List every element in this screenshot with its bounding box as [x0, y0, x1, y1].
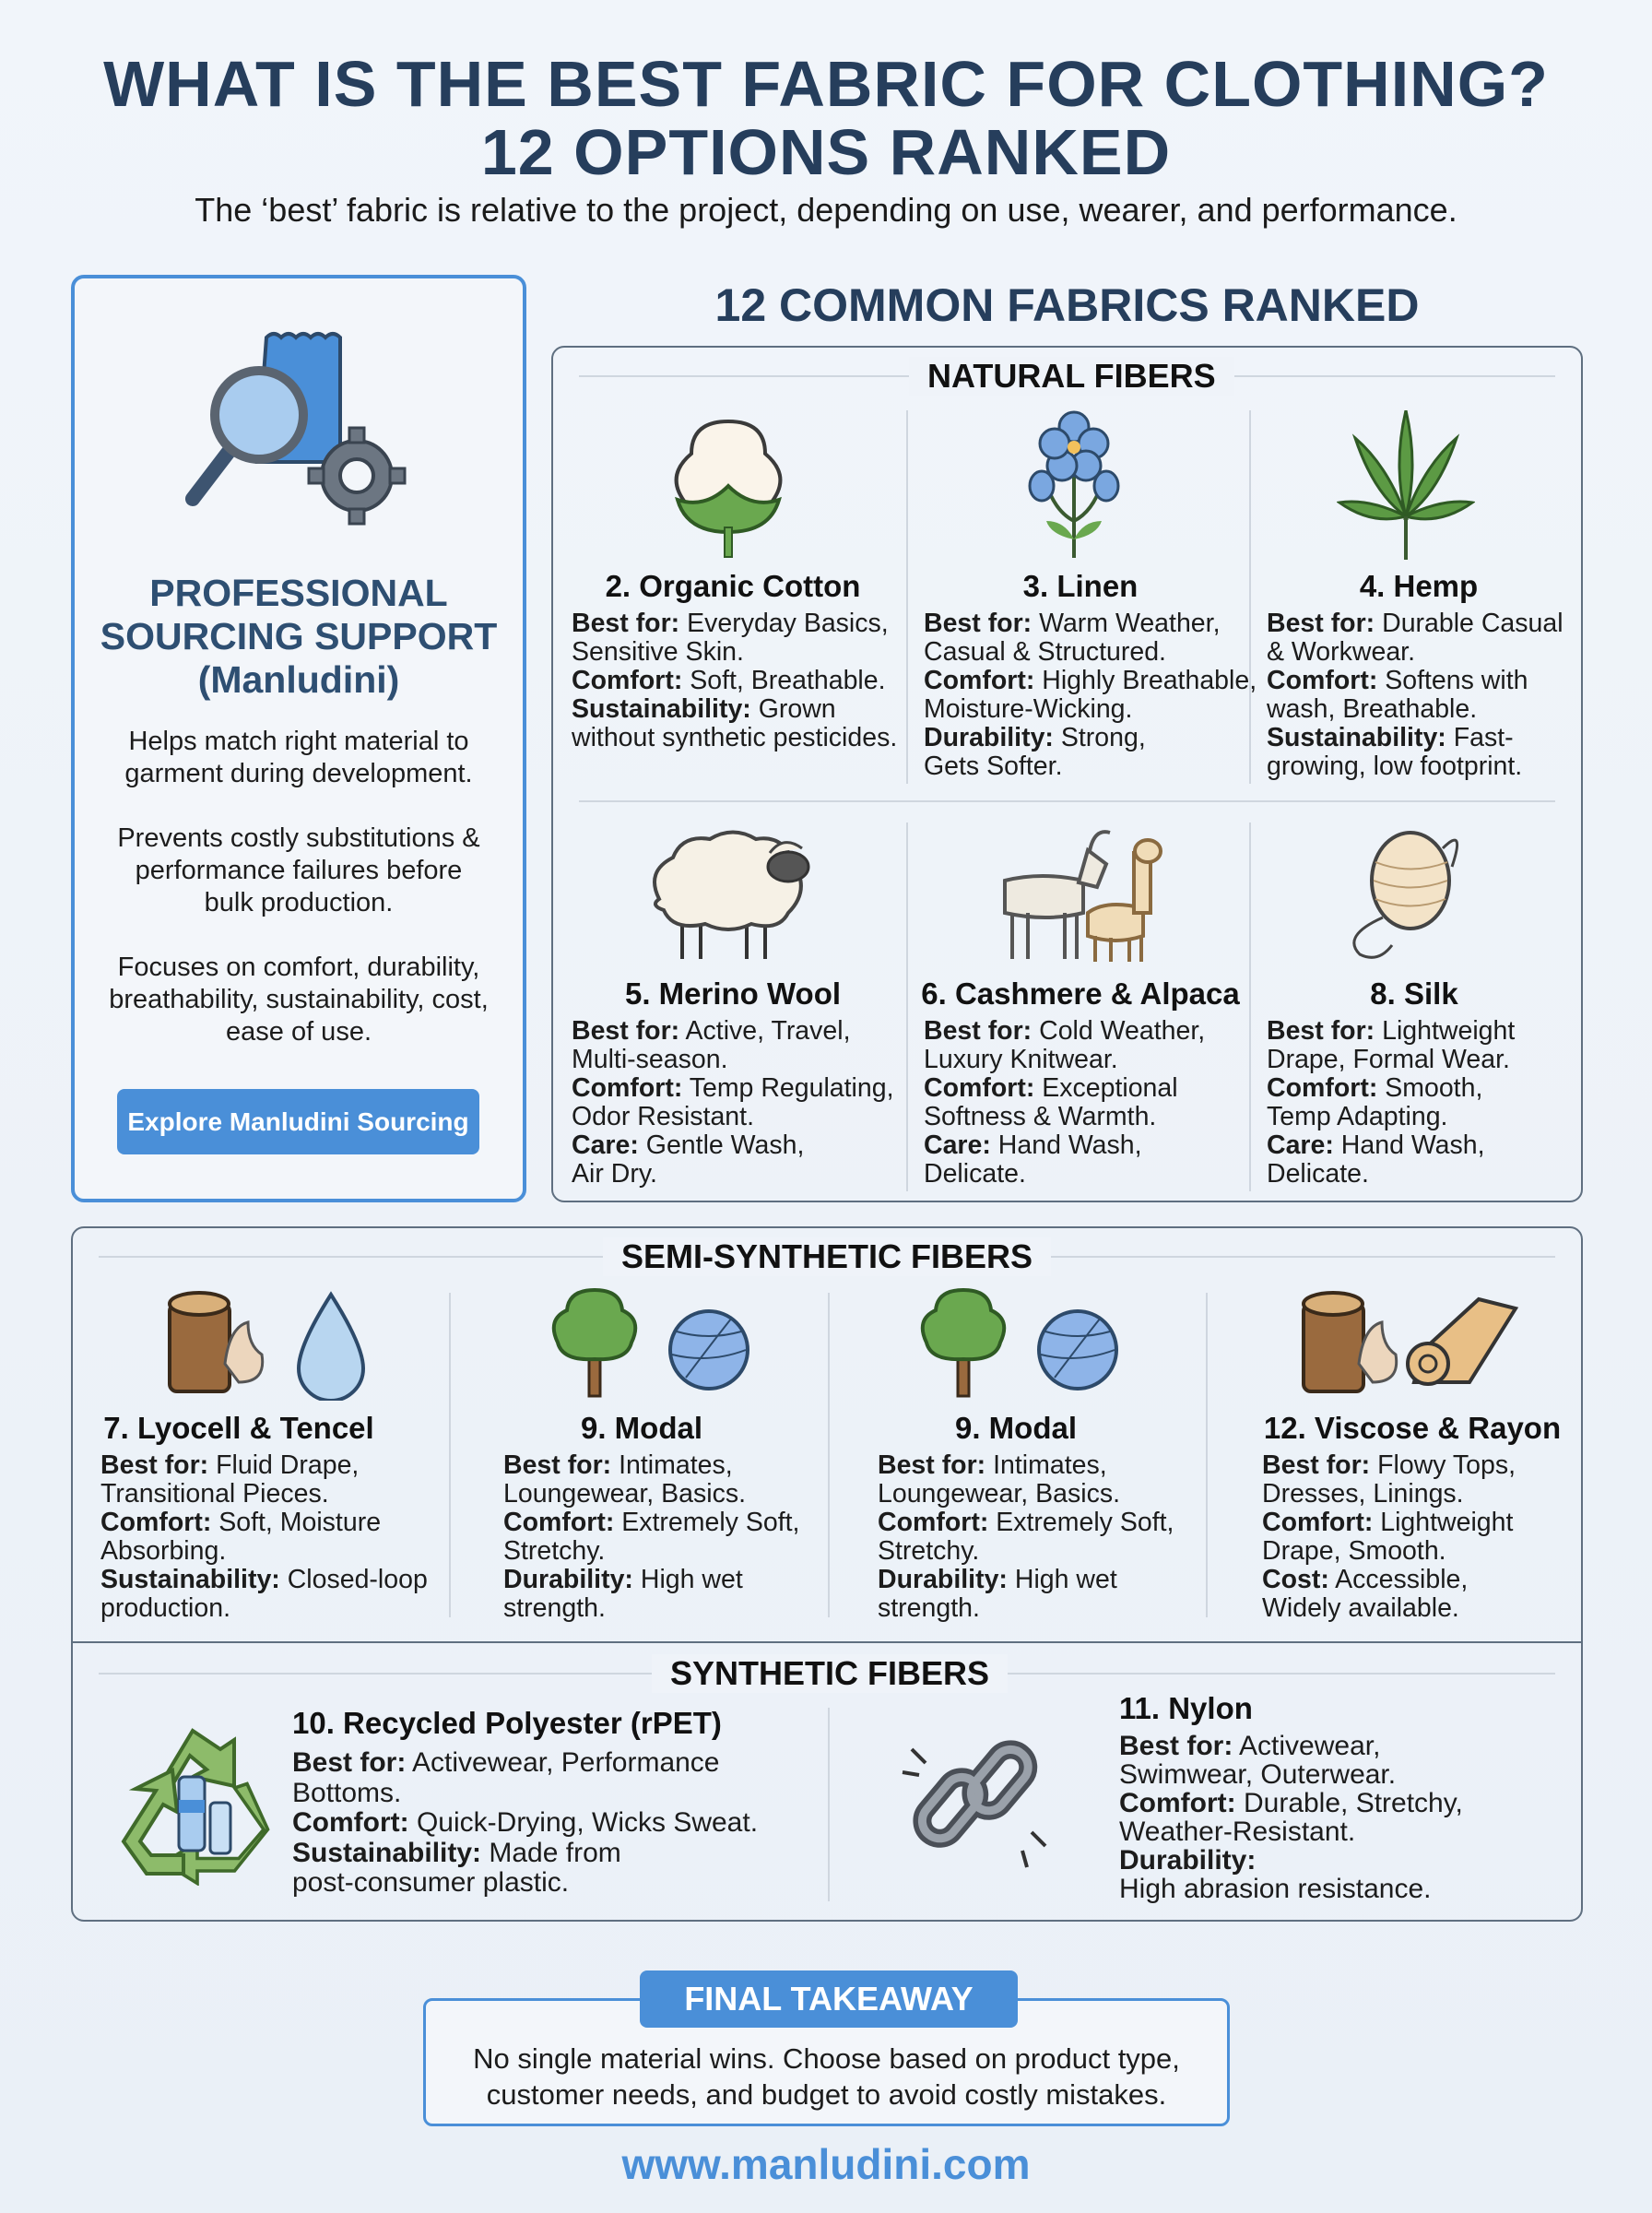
card: nylon: High abrasion resistance. [1119, 1874, 1432, 1904]
card: recycled polyester: Bottoms. [292, 1778, 401, 1807]
footer: website url: www.manludini.com [621, 2140, 1031, 2188]
callout: final takeaway [423, 1998, 1230, 2126]
card: silk: Best for: Lightweight [1267, 1016, 1515, 1046]
card: modal: strength. [503, 1593, 606, 1623]
card: hemp: Comfort: Softens with [1267, 666, 1528, 695]
card: linen: Gets Softer. [924, 751, 1062, 781]
card: nylon: Comfort: Durable, Stretchy, [1119, 1788, 1463, 1818]
text block: sourcing benefits: Prevents costly substitutions & [117, 823, 480, 853]
icon: tree and yarn [551, 1288, 749, 1398]
subtitle: The ‘best’ fabric is relative to the project, depending on use, wearer, and performance. [195, 191, 1457, 229]
card: hemp: & Workwear. [1267, 637, 1415, 667]
card: viscose and rayon: 12. Viscose & Rayon [1264, 1411, 1561, 1445]
card: hemp: 4. Hemp [1360, 569, 1478, 603]
card: cashmere and alpaca: Care: Hand Wash, [924, 1130, 1142, 1160]
card: merino wool: Air Dry. [572, 1159, 657, 1189]
card: viscose and rayon: Cost: Accessible, [1262, 1565, 1468, 1594]
card: viscose and rayon: Comfort: Lightweight [1262, 1508, 1513, 1537]
card: viscose and rayon: Drape, Smooth. [1262, 1536, 1446, 1566]
card: nylon: Durability: [1119, 1845, 1256, 1876]
card: modal (second): Best for: Intimates, [878, 1450, 1107, 1480]
card: silk: Temp Adapting. [1267, 1102, 1447, 1131]
card: lyocell and tencel [100, 1411, 428, 1623]
card: lyocell and tencel: 7. Lyocell & Tencel [103, 1411, 374, 1445]
button: explore manludini sourcing [117, 1089, 479, 1154]
card: linen: Moisture-Wicking. [924, 694, 1132, 724]
text block: sourcing benefits: performance failures before [136, 856, 462, 885]
heading: natural fibers: NATURAL FIBERS [927, 357, 1216, 395]
icon: cotton boll [675, 420, 782, 558]
heading: professional sourcing support: SOURCING SUPPORT [100, 615, 497, 657]
card: recycled polyester: Best for: Activewear, Performance [292, 1747, 719, 1778]
card: organic cotton: without synthetic pesticides. [572, 723, 897, 752]
card: linen [924, 569, 1257, 781]
card: linen: Best for: Warm Weather, [924, 609, 1221, 638]
card: recycled polyester: post-consumer plastic. [292, 1867, 569, 1898]
card: merino wool [572, 976, 894, 1189]
heading: semi-synthetic fibers: SEMI-SYNTHETIC FIBERS [621, 1237, 1032, 1275]
card: modal (second) [878, 1411, 1174, 1623]
heading: synthetic fibers: SYNTHETIC FIBERS [670, 1654, 989, 1692]
card: modal (second): Stretchy. [878, 1536, 979, 1566]
card: organic cotton: 2. Organic Cotton [606, 569, 860, 603]
icon: flax flower [1029, 411, 1119, 558]
card: nylon: Best for: Activewear, [1119, 1731, 1380, 1761]
icon: wood log and fabric roll [1302, 1291, 1519, 1393]
icon: tree and yarn (second) [920, 1288, 1118, 1398]
card: recycled polyester: Sustainability: Made from [292, 1837, 621, 1868]
card: lyocell and tencel: Sustainability: Closed-loop [100, 1565, 428, 1594]
card: modal: Durability: High wet [503, 1565, 743, 1594]
heading: professional sourcing support [100, 572, 497, 701]
card: cashmere and alpaca: 6. Cashmere & Alpaca [921, 976, 1240, 1011]
card: organic cotton: Sustainability: Grown [572, 694, 836, 724]
heading: professional sourcing support: PROFESSIONAL [149, 572, 448, 614]
button: explore manludini sourcing: Explore Manludini Sourcing [127, 1107, 469, 1136]
card: organic cotton [572, 569, 897, 752]
card: cashmere and alpaca [921, 976, 1240, 1189]
card: modal (second): 9. Modal [955, 1411, 1077, 1445]
card: recycled polyester [292, 1706, 758, 1898]
card: silk: Care: Hand Wash, [1267, 1130, 1485, 1160]
card: linen: Durability: Strong, [924, 723, 1146, 752]
card: silk: 8. Silk [1370, 976, 1458, 1011]
card: modal (second): Loungewear, Basics. [878, 1479, 1120, 1509]
icon: recycle with bottles [122, 1728, 270, 1886]
card: lyocell and tencel: Transitional Pieces. [100, 1479, 329, 1509]
card: linen: Casual & Structured. [924, 637, 1166, 667]
card: nylon [1119, 1691, 1463, 1904]
panel: natural fibers [551, 346, 1583, 1202]
heading: professional sourcing support: (Manludini) [198, 658, 399, 701]
card: silk [1267, 976, 1516, 1189]
text: takeaway message: customer needs, and budget to avoid costly mistakes. [487, 2078, 1166, 2111]
text: takeaway message [473, 2042, 1180, 2111]
card: modal (second): Durability: High wet [878, 1565, 1117, 1594]
card: viscose and rayon: Best for: Flowy Tops, [1262, 1450, 1516, 1480]
card: cashmere and alpaca: Delicate. [924, 1159, 1026, 1189]
card: silk: Delicate. [1267, 1159, 1369, 1189]
card: silk: Comfort: Smooth, [1267, 1073, 1482, 1103]
card: modal: Stretchy. [503, 1536, 605, 1566]
card: silk: Drape, Formal Wear. [1267, 1045, 1510, 1074]
card: viscose and rayon: Dresses, Linings. [1262, 1479, 1464, 1509]
icon: wood log and water drop [168, 1291, 365, 1401]
card: merino wool: Multi-season. [572, 1045, 727, 1074]
text block: sourcing benefits: garment during development. [124, 759, 473, 788]
title: WHAT IS THE BEST FABRIC FOR CLOTHING? [103, 48, 1549, 120]
text block: sourcing benefits [109, 727, 489, 1047]
card: hemp: Sustainability: Fast- [1267, 723, 1514, 752]
card: cashmere and alpaca: Softness & Warmth. [924, 1102, 1156, 1131]
card: merino wool: Care: Gentle Wash, [572, 1130, 804, 1160]
card: modal (second): strength. [878, 1593, 980, 1623]
text block: sourcing benefits: bulk production. [205, 888, 393, 917]
text block: sourcing benefits: Focuses on comfort, durability, [118, 953, 479, 982]
card: merino wool: Odor Resistant. [572, 1102, 754, 1131]
card: lyocell and tencel: production. [100, 1593, 230, 1623]
card: merino wool: Best for: Active, Travel, [572, 1016, 851, 1046]
card: cashmere and alpaca: Luxury Knitwear. [924, 1045, 1118, 1074]
title: 12 OPTIONS RANKED [481, 116, 1171, 188]
heading: 12 common fabrics ranked: 12 COMMON FABRICS RANKED [715, 279, 1419, 331]
card: cashmere and alpaca: Comfort: Exceptional [924, 1073, 1178, 1103]
card: viscose and rayon: Widely available. [1262, 1593, 1459, 1623]
card: organic cotton: Comfort: Soft, Breathable. [572, 666, 886, 695]
card: nylon: Weather-Resistant. [1119, 1817, 1355, 1847]
card: modal: 9. Modal [581, 1411, 702, 1445]
card: lyocell and tencel: Best for: Fluid Drape, [100, 1450, 359, 1480]
text block: sourcing benefits: Helps match right material to [128, 727, 469, 756]
card: recycled polyester: Comfort: Quick-Drying, Wicks Sweat. [292, 1807, 758, 1838]
card: hemp: growing, low footprint. [1267, 751, 1522, 781]
card: linen: 3. Linen [1023, 569, 1138, 603]
label: final takeaway pill: FINAL TAKEAWAY [684, 1980, 974, 2018]
icon: sheep [653, 830, 809, 959]
icon: hemp leaf [1337, 410, 1475, 560]
card: modal [503, 1411, 799, 1623]
card: hemp [1267, 569, 1564, 781]
card: hemp: Best for: Durable Casual [1267, 609, 1564, 638]
card: modal (second): Comfort: Extremely Soft, [878, 1508, 1174, 1537]
card: merino wool: 5. Merino Wool [625, 976, 841, 1011]
panel: semi-synthetic and synthetic fibers [71, 1226, 1583, 1922]
icon: silk cocoon [1352, 831, 1458, 959]
card: organic cotton: Sensitive Skin. [572, 637, 744, 667]
title [103, 48, 1549, 188]
card: nylon: Swimwear, Outerwear. [1119, 1759, 1396, 1790]
card: merino wool: Comfort: Temp Regulating, [572, 1073, 894, 1103]
card: linen: Comfort: Highly Breathable, [924, 666, 1257, 695]
text: takeaway message: No single material wins. Choose based on product type, [473, 2042, 1180, 2075]
icon: chain link [902, 1740, 1047, 1868]
text block: sourcing benefits: breathability, sustainability, cost, [109, 985, 489, 1014]
card: cashmere and alpaca: Best for: Cold Weather, [924, 1016, 1205, 1046]
card: recycled polyester: 10. Recycled Polyester (rPET) [292, 1706, 722, 1740]
card: viscose and rayon [1262, 1411, 1561, 1623]
card: hemp: wash, Breathable. [1267, 694, 1477, 724]
card: organic cotton: Best for: Everyday Basics, [572, 609, 889, 638]
panel: professional sourcing support [71, 275, 526, 1202]
label: final takeaway pill [640, 1970, 1018, 2028]
card: nylon: 11. Nylon [1119, 1691, 1253, 1725]
card: modal: Comfort: Extremely Soft, [503, 1508, 799, 1537]
card: lyocell and tencel: Absorbing. [100, 1536, 226, 1566]
icon: fabric swatch with magnifier and gear [185, 332, 406, 526]
card: lyocell and tencel: Comfort: Soft, Moisture [100, 1508, 381, 1537]
card: modal: Best for: Intimates, [503, 1450, 733, 1480]
card: modal: Loungewear, Basics. [503, 1479, 746, 1509]
icon: goat and alpaca [1003, 830, 1162, 962]
text block: sourcing benefits: ease of use. [226, 1017, 372, 1047]
